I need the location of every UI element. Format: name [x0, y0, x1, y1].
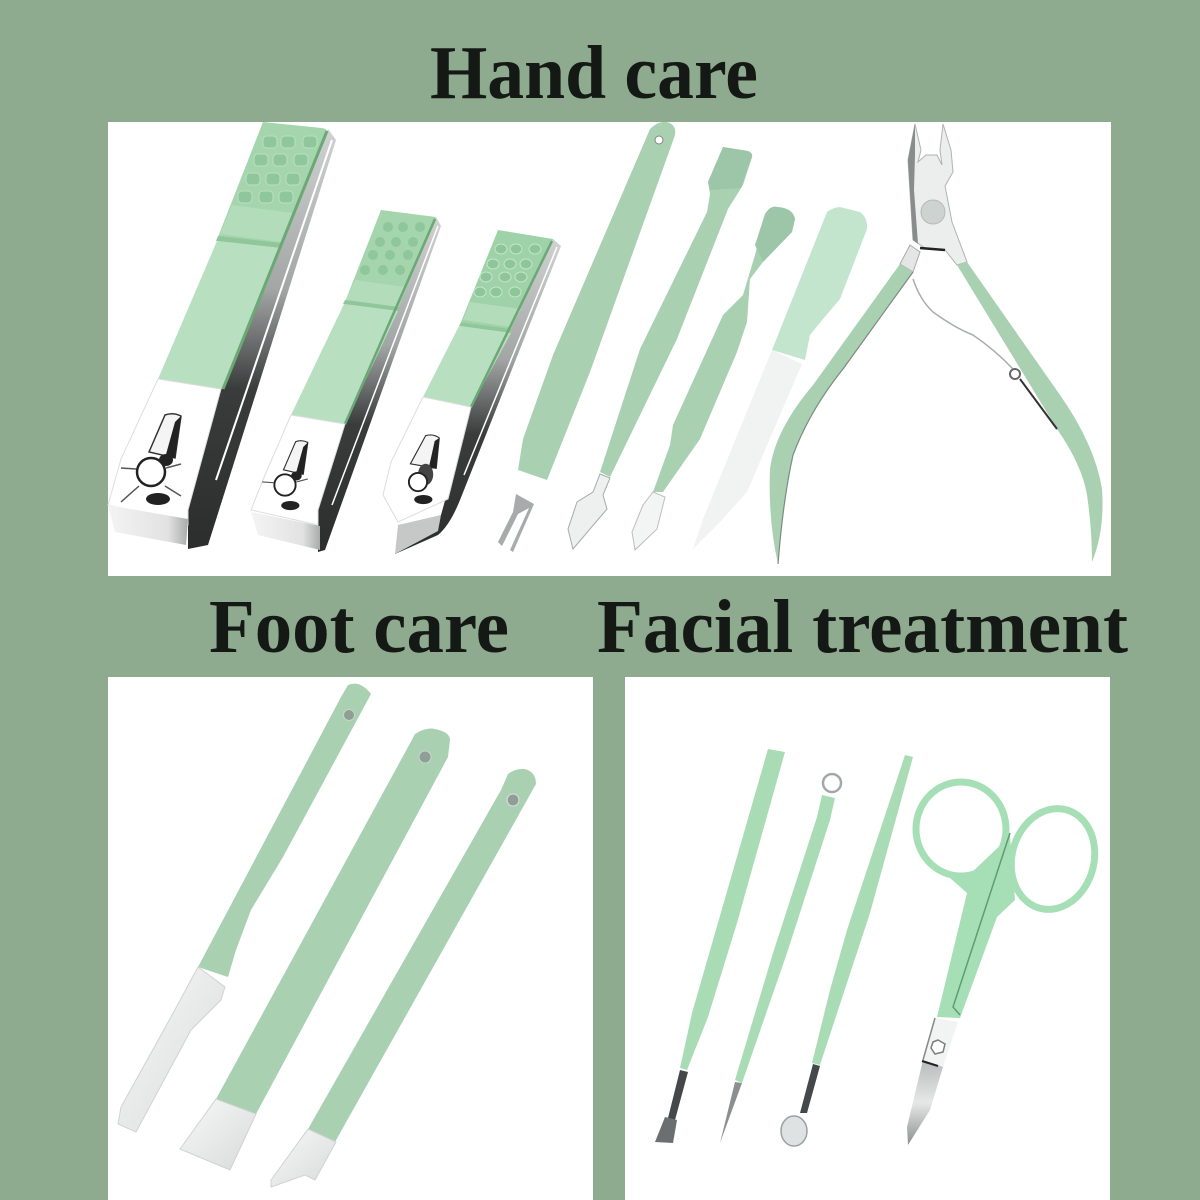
heading: Hand care: Hand care [430, 31, 758, 115]
icon: slanted foot knife [271, 769, 536, 1187]
clipper joint [121, 414, 181, 505]
icon: cuticle nippers [770, 124, 1103, 564]
icon: large nail clipper [108, 122, 336, 549]
heading: Facial treatment: Facial treatment [597, 585, 1128, 669]
icon: small curved nail clipper [383, 230, 561, 554]
icon: comedone scoop tool [655, 749, 785, 1143]
clipper dimples [238, 136, 317, 203]
clipper joint [262, 441, 308, 510]
clipper joint [409, 435, 439, 504]
panel: hand care [108, 122, 1111, 576]
icon: double-ended pusher [632, 207, 795, 550]
icon: cuticle pusher [568, 147, 752, 549]
icon: narrow foot knife [118, 684, 371, 1132]
icon: loop extractor [720, 774, 841, 1143]
icon: medium nail clipper [251, 210, 441, 552]
clipper dimples [360, 222, 425, 275]
icon: wide foot knife [180, 729, 450, 1170]
icon: scissors [907, 782, 1106, 1145]
panel: facial treatment [625, 677, 1110, 1200]
panel: foot care [108, 677, 593, 1200]
icon: nail file [693, 207, 867, 549]
icon: spoon extractor [781, 755, 913, 1146]
icon: cuticle trimmer [498, 122, 675, 552]
heading: Foot care: Foot care [209, 585, 509, 669]
clipper dimples [474, 244, 541, 297]
